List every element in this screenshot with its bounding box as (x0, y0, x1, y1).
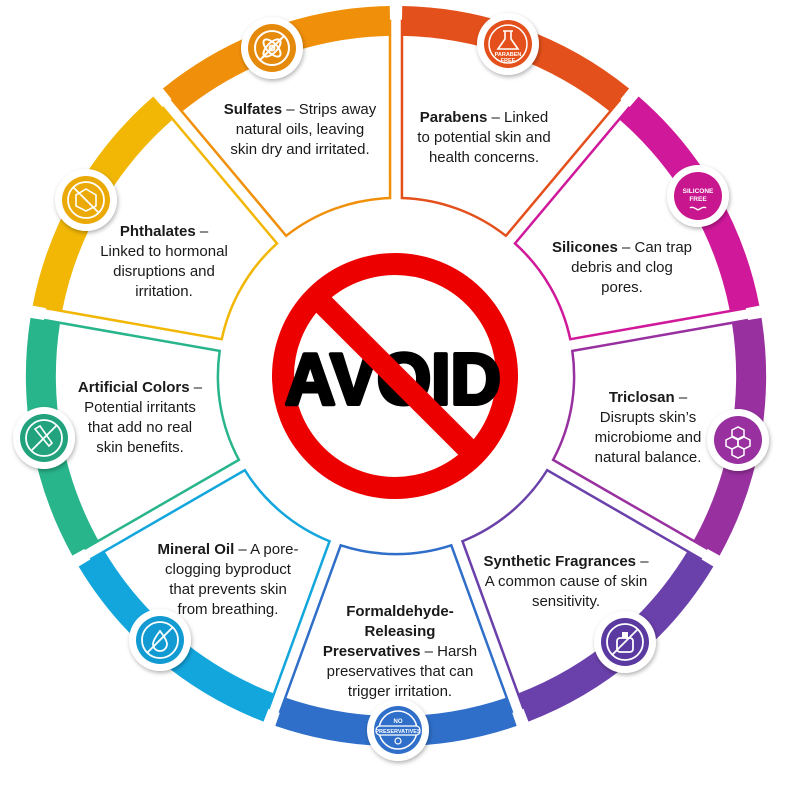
panel: silicones (485, 98, 761, 392)
text: formaldehyde: Releasing (365, 623, 435, 640)
text: formaldehyde: trigger irritation. (348, 683, 452, 700)
icon: silicones: FREE (689, 196, 707, 203)
panel: triclosan (543, 291, 766, 552)
icon: formaldehyde: NO (394, 719, 403, 725)
text: mineral oil: clogging byproduct (165, 561, 291, 578)
text: sulfates (224, 101, 376, 158)
text: mineral oil (158, 541, 298, 618)
text: synthetic fragrances: Synthetic Fragrances – (483, 553, 649, 570)
icon: silicones: SILICONE (683, 188, 714, 195)
avoid sign: AVOID (285, 340, 501, 420)
panel: parabens (345, 3, 626, 257)
icon: formaldehyde: PRESERVATIVES (375, 729, 421, 735)
panel: artificial colors (26, 291, 249, 552)
text: triclosan: microbiome and (595, 429, 701, 446)
text: artificial colors: that add no real (88, 419, 192, 436)
panel: sulfates (166, 3, 447, 257)
icon: phthalates (55, 169, 117, 231)
icon: artificial colors (13, 407, 75, 469)
text: artificial colors: Potential irritants (84, 399, 196, 416)
text: synthetic fragrances: A common cause of skin (485, 573, 647, 590)
text: phthalates: Linked to hormonal (100, 243, 228, 260)
text: mineral oil: Mineral Oil – A pore- (158, 541, 298, 558)
icon: mineral oil (129, 609, 191, 671)
text: sulfates: Sulfates – Strips away (224, 101, 376, 118)
text: phthalates: disruptions and (113, 263, 215, 280)
text: triclosan: Triclosan – (609, 389, 687, 406)
text: synthetic fragrances: sensitivity. (532, 593, 600, 610)
text: phthalates: irritation. (135, 283, 193, 300)
text: parabens (417, 109, 551, 166)
text: artificial colors: skin benefits. (96, 439, 184, 456)
panel: mineral oil (79, 431, 376, 722)
text: sulfates: natural oils, leaving (236, 121, 364, 138)
icon: parabens: FREE (501, 58, 516, 64)
text: silicones (552, 239, 692, 296)
text: parabens: Parabens – Linked (420, 109, 548, 126)
text: silicones: pores. (601, 279, 643, 296)
avoid sign (283, 264, 507, 488)
panel: synthetic fragrances (416, 431, 713, 722)
text: formaldehyde: Formaldehyde- (346, 603, 454, 620)
text: synthetic fragrances (483, 553, 649, 610)
text: formaldehyde: Preservatives – Harsh (323, 643, 477, 660)
text: parabens: to potential skin and (417, 129, 551, 146)
panel: phthalates (31, 98, 307, 392)
icon: formaldehyde (367, 699, 429, 761)
text: formaldehyde (323, 603, 477, 700)
icon: sulfates (241, 17, 303, 79)
icon: triclosan (707, 409, 769, 471)
text: parabens: health concerns. (429, 149, 539, 166)
text: artificial colors (78, 379, 202, 456)
panel: formaldehyde (280, 545, 512, 731)
text: silicones: Silicones – Can trap (552, 239, 692, 256)
text: silicones: debris and clog (571, 259, 673, 276)
icon: parabens (477, 13, 539, 75)
text: mineral oil: from breathing. (178, 601, 278, 618)
text: triclosan: natural balance. (595, 449, 701, 466)
text: triclosan: Disrupts skin’s (600, 409, 696, 426)
text: formaldehyde: preservatives that can (327, 663, 473, 680)
icon: silicones (667, 165, 729, 227)
icon: synthetic fragrances (594, 611, 656, 673)
text: triclosan (595, 389, 701, 466)
text: artificial colors: Artificial Colors – (78, 379, 202, 396)
text: mineral oil: that prevents skin (169, 581, 287, 598)
text: sulfates: skin dry and irritated. (230, 141, 370, 158)
text: phthalates (100, 223, 228, 300)
text: phthalates: Phthalates – (120, 223, 208, 240)
icon: parabens: PARABEN (495, 52, 521, 58)
